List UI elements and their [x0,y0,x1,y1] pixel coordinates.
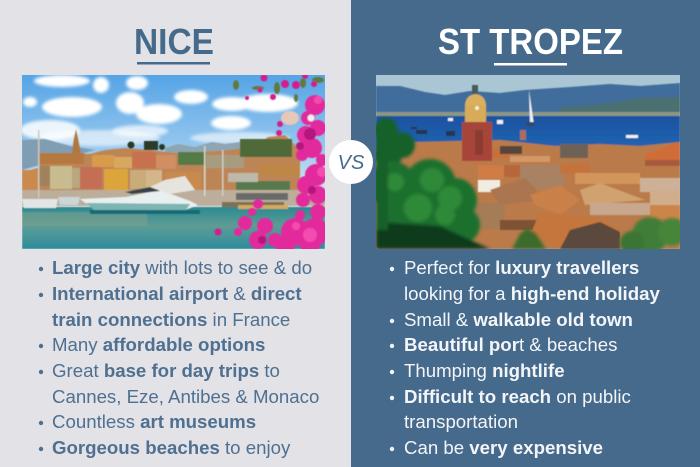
hills [22,139,95,170]
list: Nice highlights [39,257,319,458]
list: St Tropez highlights: Thumping nightlife [404,360,565,381]
list: Nice highlights: Many affordable options [52,334,265,355]
flowers [214,73,329,255]
heading: NICE: NICE [134,21,214,62]
photo: Nice harbour [20,73,329,255]
panel: St Tropez background [351,0,700,467]
list: Nice highlights: Cannes, Eze, Antibes & Monaco [52,386,319,407]
photo: St Tropez bay [368,75,686,255]
boats [22,199,58,208]
boats [448,90,638,138]
list: St Tropez highlights: Beautiful port & beaches [404,334,617,355]
list: Nice highlights: International airport & direct [52,283,302,304]
list: St Tropez highlights: looking for a high-end holiday [404,283,660,304]
VS badge: VS [338,152,365,174]
list: Nice highlights: Gorgeous beaches to enjoy [52,437,291,458]
list: St Tropez highlights: Small & walkable old town [404,309,633,330]
list: St Tropez highlights: transportation [404,411,518,432]
list: St Tropez highlights: Perfect for luxury travellers [404,257,639,278]
trees [368,118,686,255]
quay [22,190,325,206]
list: St Tropez highlights [390,257,660,458]
list: Nice highlights: Large city with lots to see & do [52,257,312,278]
list: St Tropez highlights: Can be very expensive [404,437,603,458]
list: Nice highlights: Countless art museums [52,411,256,432]
tower [462,122,492,161]
town base [376,140,680,249]
VS badge [329,140,373,184]
town base [30,134,301,191]
list: St Tropez highlights: Difficult to reach on public [404,386,631,407]
panel: Nice background [0,0,351,467]
list: Nice highlights: Great base for day trips to [52,360,280,381]
heading: ST TROPEZ: ST TROPEZ [438,21,623,62]
list: Nice highlights: train connections in France [52,309,290,330]
water [22,207,325,249]
